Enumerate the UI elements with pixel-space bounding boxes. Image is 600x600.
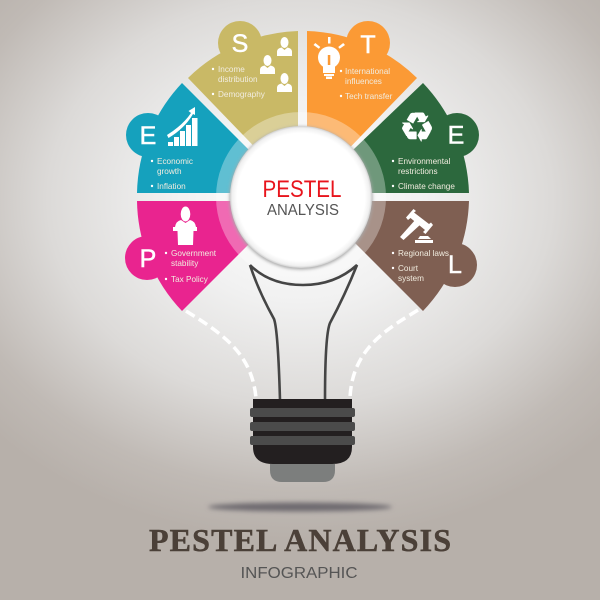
text: social factors: Demography [218,90,266,99]
letter E: E [140,122,156,150]
panel: environmental [308,83,479,193]
icon: people [260,37,292,92]
text: political factors: stability [171,259,199,268]
text: political factors: Tax Policy [171,275,209,284]
text: social factors: distribution [218,75,258,84]
text: legal factors: Court [398,264,419,273]
icon: recycle: ♻ [399,105,435,151]
panel: social [188,21,298,192]
text: environmental factors: Environmental [398,157,451,166]
dashed connector right [350,310,418,398]
text: technological factors [340,67,393,101]
text: technological factors: International [345,67,390,76]
icon: gavel [400,209,433,243]
icon: growth chart [167,107,198,146]
text: legal factors: Regional laws [398,249,449,258]
heading: ANALYSIS: ANALYSIS [267,202,339,219]
text: economic factors: Economic [157,157,193,166]
center circle [230,126,372,270]
panel: legal [313,201,477,311]
bulb shadow [208,502,392,512]
text: social factors [212,65,266,99]
letter S: S [232,30,248,58]
letter E: E [448,122,464,150]
text: economic factors: growth [157,167,182,176]
text: political factors: Government [171,249,217,258]
text: political factors [165,249,217,284]
text: legal factors [392,249,449,283]
bulb glass outline [250,265,357,400]
inner translucent ring [224,120,378,274]
letter T: T [360,31,376,59]
text: environmental factors: Climate change [398,182,455,191]
title: PESTEL ANALYSIS [149,522,451,558]
letter L: L [448,251,462,279]
text: environmental factors: restrictions [398,167,438,176]
text: legal factors: system [398,274,424,283]
dashed connector left [186,311,256,398]
icon: speaker podium [173,206,197,245]
text: social factors: Income [218,65,245,74]
letter P: P [140,245,156,273]
subtitle: INFOGRAPHIC [240,565,358,582]
panel: technological [307,21,417,192]
text: economic factors: Inflation [157,182,186,191]
panel: political [125,201,292,311]
text: technological factors: Tech transfer [345,92,393,101]
heading: PESTEL: PESTEL [262,176,342,203]
icon: light bulb [314,37,345,79]
panel: economic [126,83,292,193]
text: technological factors: influences [345,77,382,86]
bulb base [250,399,355,482]
text: environmental factors [392,157,455,191]
text: economic factors [151,157,193,191]
